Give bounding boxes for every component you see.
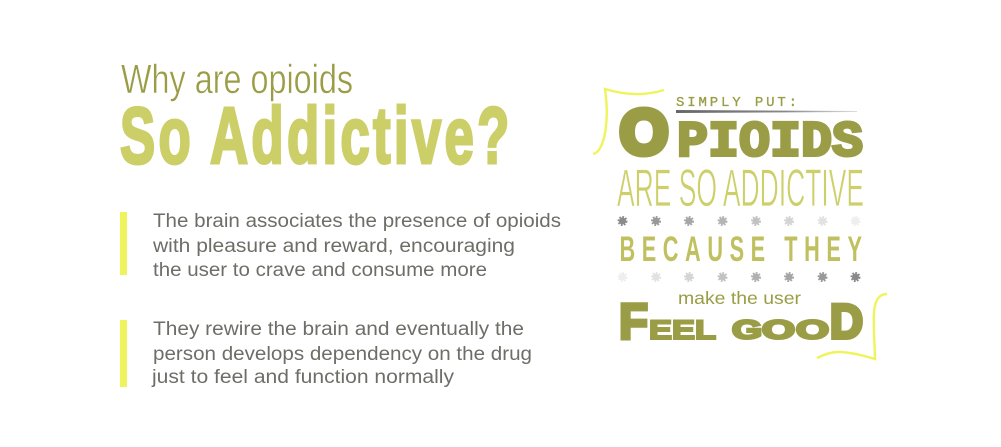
- swirl top left: [593, 89, 664, 154]
- panel: simply put typographic quote: [593, 89, 887, 359]
- swirl bottom right: [817, 294, 887, 359]
- text block 1: with pleasure and reward, encouraging: [152, 236, 515, 257]
- accent bar 1: [120, 212, 127, 275]
- text block 2: just to feel and function normally: [151, 367, 455, 388]
- text block 2: They rewire the brain and eventually the: [153, 319, 524, 340]
- word: opioids: [620, 98, 863, 172]
- dotted row 2: [619, 274, 859, 280]
- point 2: [120, 319, 532, 388]
- words: feel good: F: [619, 294, 648, 350]
- words: feel good: D: [830, 296, 863, 349]
- text block 2: person develops dependency on the drug: [153, 344, 532, 365]
- heading line: why are opioids: Why are opioids: [121, 56, 353, 102]
- text block 1: [152, 211, 561, 281]
- accent bar 2: [120, 320, 127, 387]
- heading: [120, 56, 509, 181]
- line: because they: BECAUSE THEY: [620, 231, 862, 269]
- words: feel good: G: [732, 314, 762, 344]
- label: simply put: SIMPLY PUT:: [676, 95, 797, 111]
- dotted row 1: [619, 218, 859, 224]
- words: feel good: O: [762, 314, 795, 344]
- words: feel good: O: [796, 314, 829, 344]
- word: opioids: O: [620, 98, 668, 168]
- line: make the user: make the user: [678, 288, 801, 308]
- text block 1: The brain associates the presence of opioids: [153, 211, 561, 232]
- words: feel good: EEL: [649, 315, 716, 345]
- text block 2: [151, 319, 532, 388]
- text block 1: the user to crave and consume more: [153, 260, 487, 281]
- brush line: [676, 110, 857, 113]
- word: opioids: PIOIDS: [677, 114, 863, 172]
- heading line: so addictive: So Addictive?: [120, 92, 509, 181]
- words: feel good: [619, 294, 863, 350]
- point 1: [120, 211, 561, 281]
